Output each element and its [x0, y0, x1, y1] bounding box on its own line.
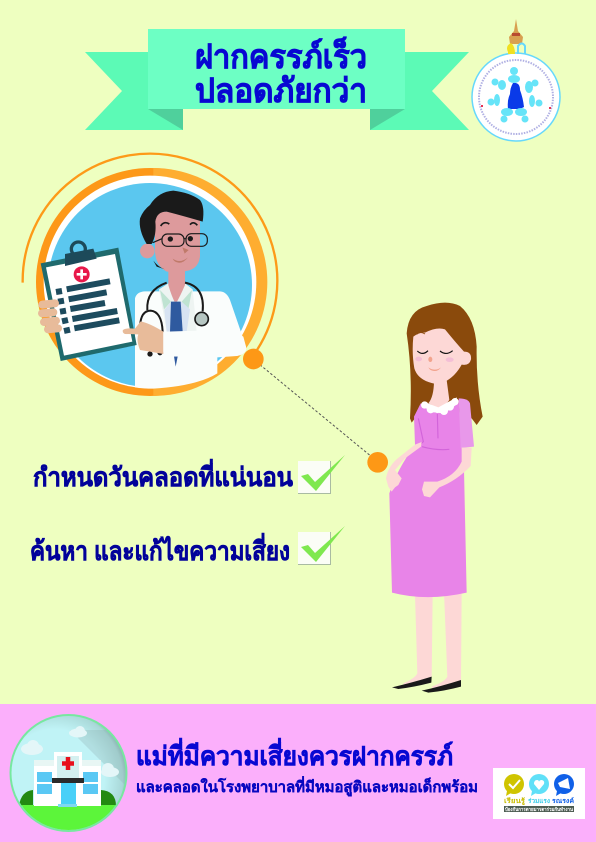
campaign words — [504, 796, 574, 806]
left hand — [386, 442, 422, 492]
hands — [42, 303, 246, 357]
shoes — [392, 677, 461, 693]
bottom band — [0, 704, 596, 842]
connector dot: doctor — [243, 349, 264, 369]
doctor figure — [135, 191, 246, 389]
dress seams — [402, 414, 449, 460]
footer subheading: และคลอดในโรงพยาบาลที่มีหมอสูติและหมอเด็กพร้อม — [136, 776, 478, 797]
clipboard — [41, 242, 137, 361]
connector line — [253, 359, 378, 462]
icon: heart bubble — [529, 774, 549, 796]
campaign words: ร่วมแรง — [528, 797, 550, 805]
checklist item 2: ค้นหา และแก้ไขความเสี่ยง — [30, 532, 290, 566]
pregnant woman illustration — [367, 303, 483, 693]
title ribbon — [85, 29, 469, 130]
face details — [415, 333, 454, 371]
footer heading: แม่ที่มีความเสี่ยงควรฝากครรภ์ — [136, 737, 453, 771]
campaign logo — [493, 768, 585, 819]
checklist item 1: กำหนดวันคลอดที่แน่นอน — [33, 458, 293, 492]
connector dot: woman — [367, 452, 388, 473]
checklist item 1 — [33, 455, 345, 494]
icon: check bubble — [504, 774, 524, 796]
sleeve — [459, 398, 474, 448]
collar — [421, 397, 459, 415]
dress — [389, 400, 467, 597]
campaign words: เรียนรู้ — [504, 796, 526, 806]
hair fringe — [420, 310, 475, 350]
title: ปลอดภัยกว่า — [195, 72, 367, 109]
logo emblem — [472, 19, 560, 141]
icon: hospital — [10, 714, 128, 832]
legs — [403, 592, 462, 689]
orange ring — [36, 168, 267, 396]
icon: megaphone bubble — [554, 774, 574, 796]
title: ฝากครรภ์เร็ว — [195, 36, 367, 75]
doctor illustration — [23, 154, 277, 396]
back hair — [407, 303, 483, 425]
right arm — [422, 448, 472, 497]
title — [195, 36, 367, 109]
campaign tagline: ป้องกันการตายมารดาร่วมกันทำงาน — [505, 806, 574, 813]
campaign words: รณรงค์ — [552, 797, 574, 805]
neck and face — [413, 329, 471, 410]
outer arc — [23, 154, 277, 350]
